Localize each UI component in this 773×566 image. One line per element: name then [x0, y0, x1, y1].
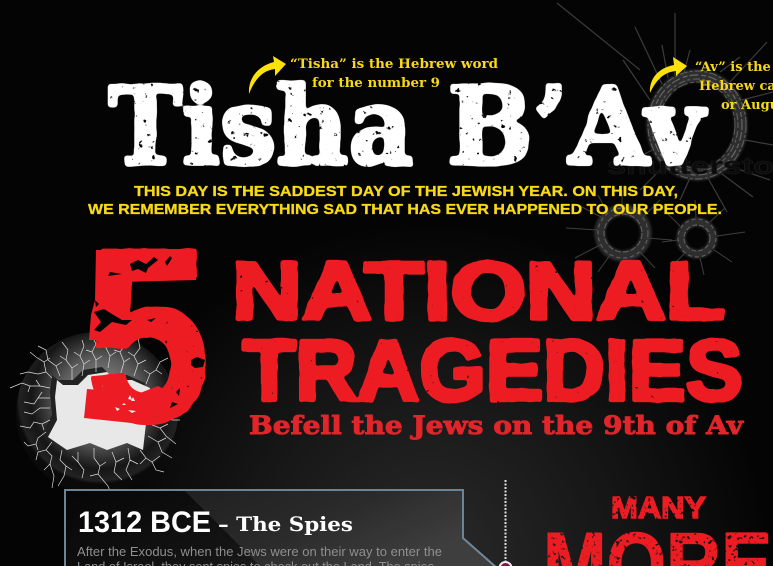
top bar and stem reinforcement — [89, 250, 196, 340]
watermark: shutterstock — [607, 153, 773, 180]
note: Tisha: “Tisha” is the Hebrew word — [290, 57, 498, 72]
note: Av — [695, 60, 773, 113]
panel highlight — [185, 491, 495, 566]
panel heading — [78, 506, 353, 539]
specks on tail — [115, 395, 136, 413]
arrow: Tisha — [249, 56, 286, 94]
bullet holes and cracks — [557, 3, 773, 275]
title: Tisha — [108, 64, 413, 190]
white burst — [48, 372, 150, 450]
panel: 1312 BCE — [65, 490, 497, 566]
panel body text: After the Exodus, when the Jews were on their way to enter the — [77, 544, 442, 559]
arrow: Av — [650, 57, 687, 93]
big number 5: 5 — [86, 198, 210, 473]
distress marks on the 5 — [94, 256, 205, 408]
title — [108, 64, 707, 190]
heading: many more — [543, 490, 772, 566]
heading: national tragedies: NATIONAL — [232, 246, 725, 337]
orb with cracks — [10, 332, 180, 496]
large bullet hole — [557, 3, 773, 212]
tail of the 5 — [84, 386, 170, 423]
heading: many more: MANY — [611, 490, 706, 525]
subtitle: THIS DAY IS THE SADDEST DAY OF THE JEWISH YEAR. ON THIS DAY, — [134, 183, 678, 200]
lightning cracks — [10, 336, 180, 496]
panel heading: 1312 BCE — [78, 506, 211, 539]
note: Tisha — [290, 57, 498, 91]
small bullet hole right — [662, 200, 745, 275]
subheading: Befell the Jews on the 9th of Av — [249, 411, 745, 440]
small bullet hole left — [566, 190, 672, 272]
subtitle — [88, 183, 722, 218]
subtitle: WE REMEMBER EVERYTHING SAD THAT HAS EVER HAPPENED TO OUR PEOPLE. — [88, 201, 722, 218]
panel body text — [77, 544, 442, 566]
timeline — [500, 480, 512, 566]
note: Tisha: for the number 9 — [312, 76, 440, 91]
note: Av: “Av” is the — [695, 60, 771, 75]
title: B’Av — [447, 64, 707, 190]
heading: national tragedies: TRAGEDIES — [243, 323, 743, 419]
heading: national tragedies — [232, 246, 743, 419]
panel heading: – The Spies — [218, 512, 353, 536]
burst shadow — [43, 367, 145, 445]
